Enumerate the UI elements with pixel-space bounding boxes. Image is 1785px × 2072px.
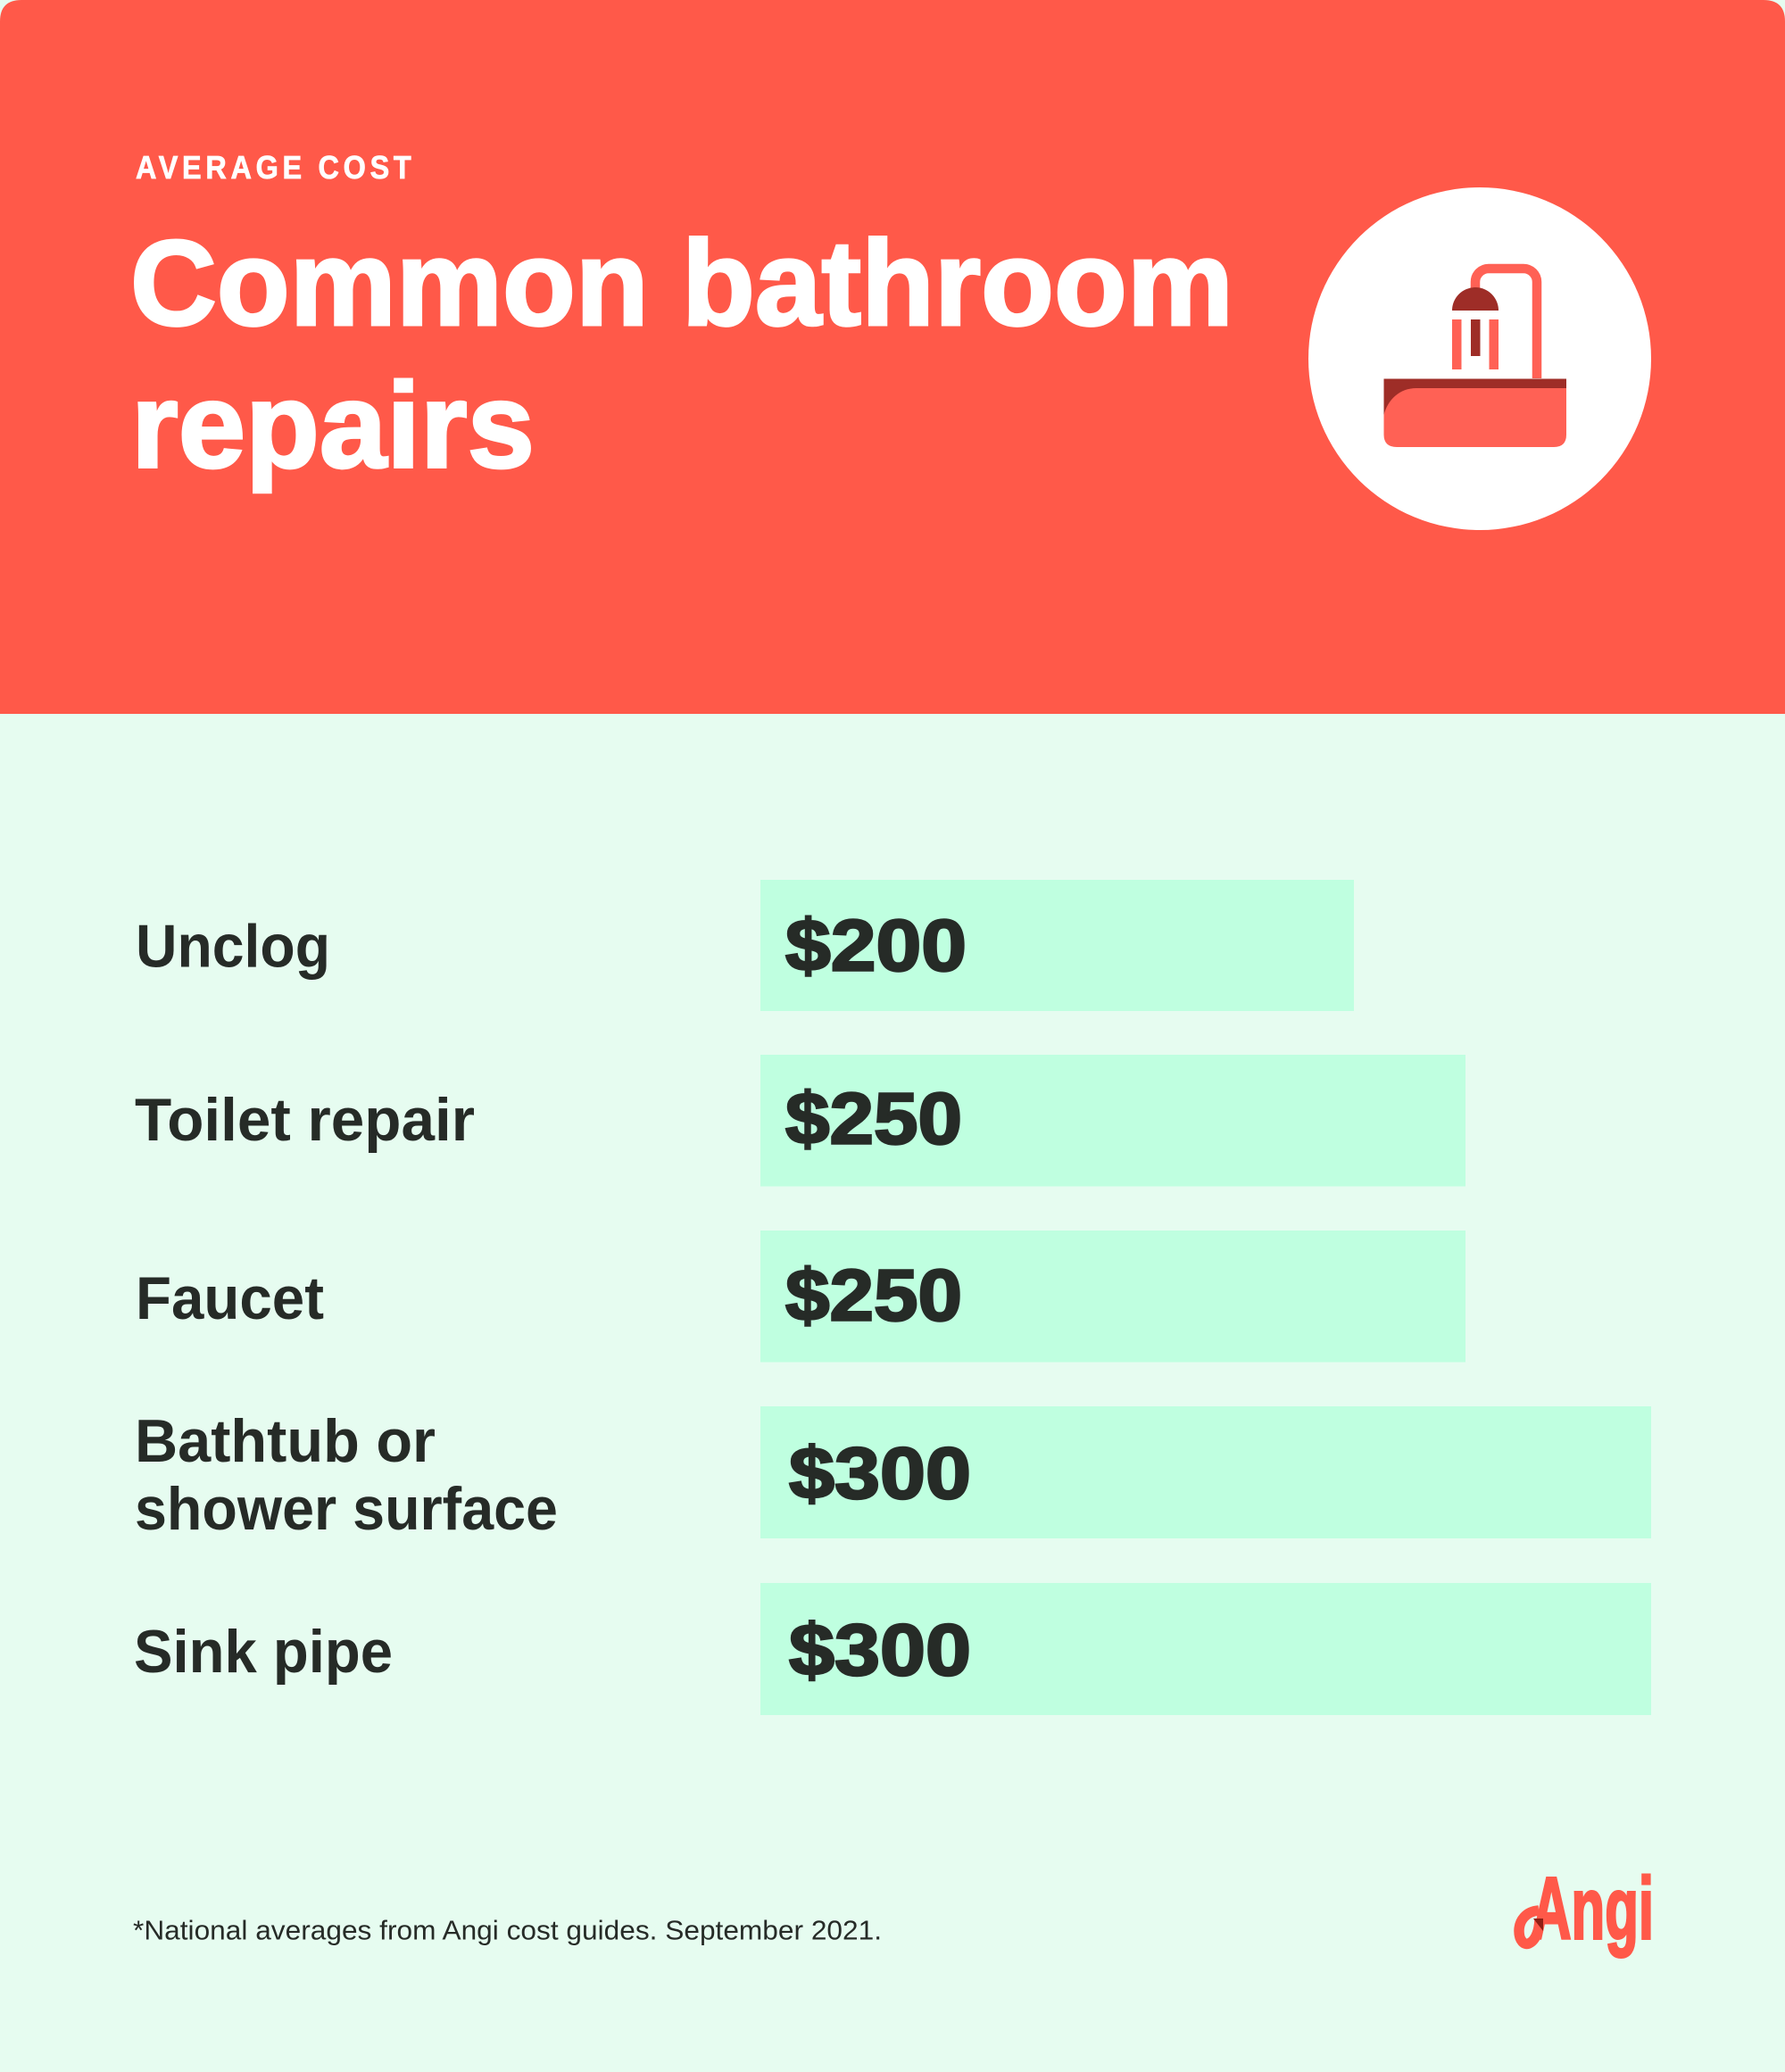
row: Unclog: Unclog [136, 912, 330, 980]
row: Sink pipe: $300 [789, 1610, 971, 1691]
row: Faucet: Faucet [136, 1264, 324, 1332]
icon: shower and bathtub in white circle [1308, 187, 1651, 530]
row: Sink pipe [134, 1583, 1651, 1715]
row: Bathtub or shower surface [135, 1406, 1651, 1543]
row: Toilet repair: Toilet repair [135, 1086, 475, 1154]
row: Toilet repair [135, 1055, 1465, 1187]
title [130, 215, 1233, 493]
row: Unclog: $200 [785, 905, 967, 987]
title: Common bathroom [130, 215, 1233, 351]
row: Faucet: $250 [785, 1255, 962, 1337]
title: repairs [131, 357, 535, 493]
logo: Angi [1519, 1860, 1654, 1958]
row: Bathtub or shower surface: Bathtub or [135, 1407, 436, 1475]
footnote: *National averages from Angi cost guides. September 2021. [133, 1915, 882, 1945]
row: Toilet repair: $250 [785, 1078, 962, 1160]
row: Bathtub or shower surface: shower surface [135, 1475, 558, 1543]
eyebrow: average cost: AVERAGE COST [136, 150, 411, 186]
logo: Angi: Angi [1532, 1860, 1654, 1958]
row: Faucet [136, 1231, 1465, 1362]
row: Sink pipe: Sink pipe [134, 1618, 393, 1686]
row: Bathtub or shower surface: $300 [789, 1433, 971, 1514]
header panel [0, 0, 1785, 714]
row: Unclog [136, 880, 1354, 1011]
